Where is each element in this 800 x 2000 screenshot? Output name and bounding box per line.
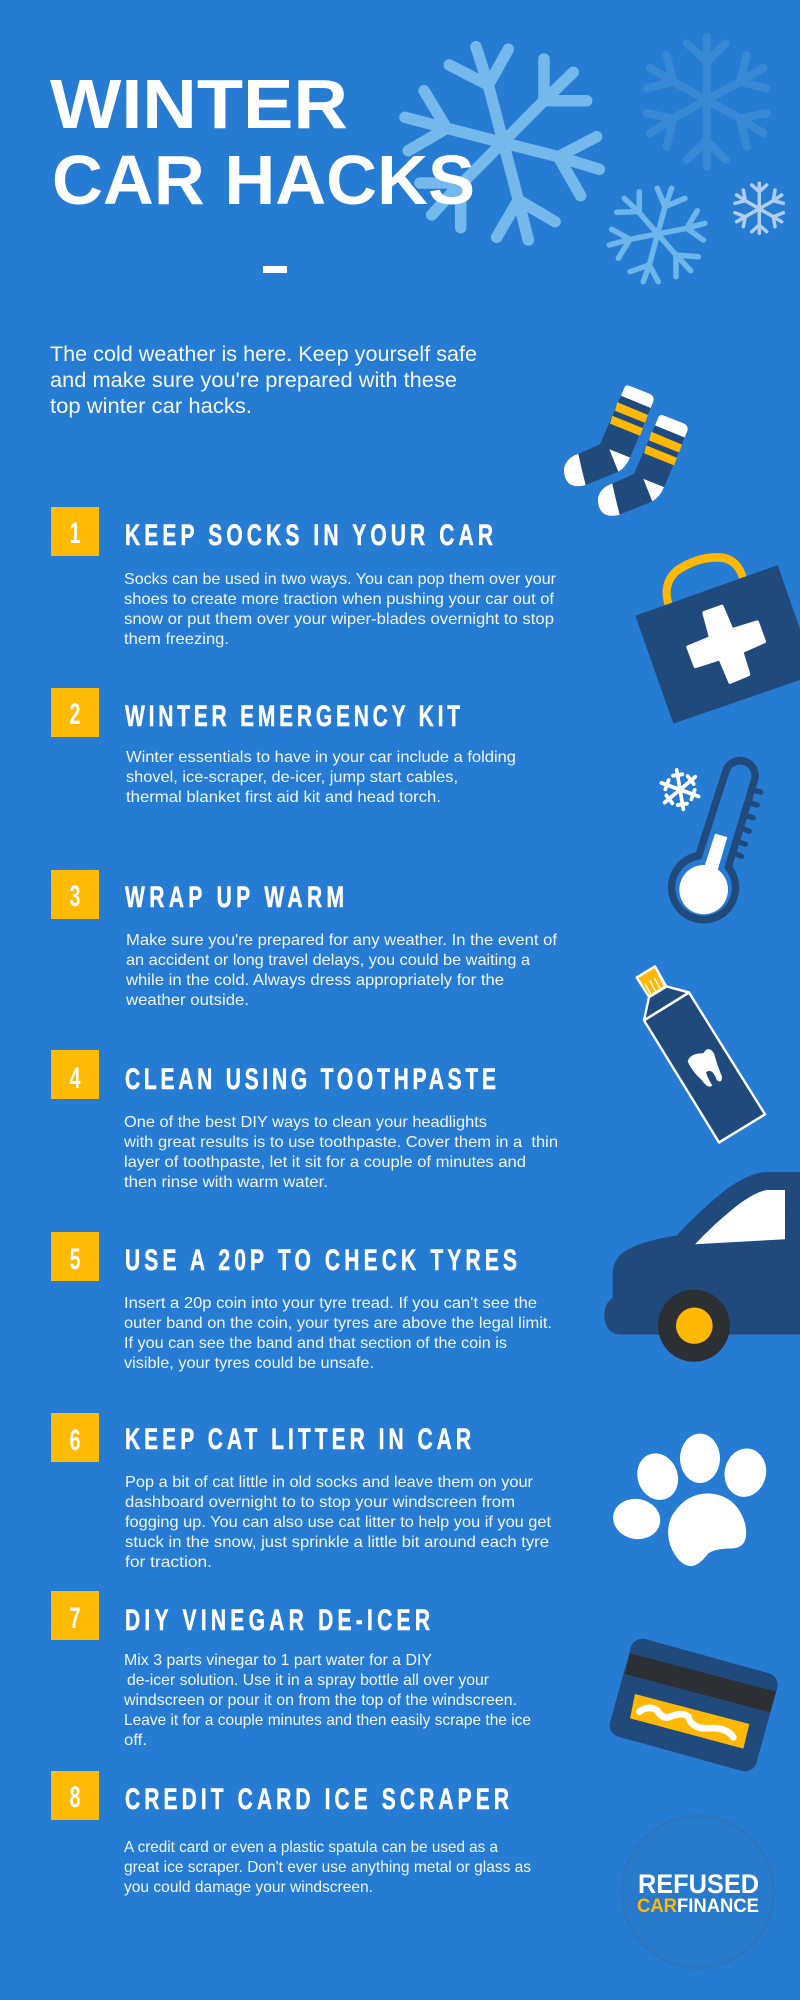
body text 3: an accident or long travel delays, you could be waiting a <box>126 952 530 969</box>
number badge 1: 1 <box>70 517 80 550</box>
number badge 5 <box>51 1232 99 1281</box>
intro text: and make sure you're prepared with these <box>50 368 457 392</box>
icon: car <box>604 1172 800 1362</box>
title: WINTER <box>50 65 348 143</box>
panel: tip 3 <box>51 870 558 1009</box>
body text 3 <box>125 932 558 1009</box>
body text 4 <box>123 1114 558 1191</box>
body text 7: de-icer solution. Use it in a spray bottle all over your <box>127 1672 490 1689</box>
logo: CARFINANCE <box>637 1895 759 1917</box>
body text 1: shoes to create more traction when pushing your car out of <box>124 591 555 608</box>
body text 4: then rinse with warm water. <box>124 1174 328 1191</box>
number badge 4: 4 <box>70 1062 80 1095</box>
body text 5: outer band on the coin, your tyres are above the legal limit. <box>124 1315 552 1332</box>
panel: tip 4 <box>51 1050 558 1191</box>
right sock <box>598 415 688 516</box>
icon: first aid kit <box>635 557 800 724</box>
body text 5: Insert a 20p coin into your tyre tread. If you can't see the <box>124 1295 537 1312</box>
panel: tip 2 <box>51 688 516 806</box>
number badge 5: 5 <box>70 1243 80 1276</box>
body text 1: snow or put them over your wiper-blades overnight to stop <box>124 611 554 628</box>
body text 7 <box>123 1652 531 1749</box>
body text 7: windscreen or pour it on from the top of the windscreen. <box>123 1692 517 1709</box>
heading 3: WRAP UP WARM <box>125 882 344 914</box>
body text 6: fogging up. You can also use cat litter to help you if you get <box>125 1514 552 1531</box>
body text 6: for traction. <box>125 1554 212 1571</box>
body text 7: Leave it for a couple minutes and then easily scrape the ice <box>124 1712 531 1729</box>
body text 2 <box>126 749 516 806</box>
body text 6 <box>125 1474 552 1571</box>
title: CAR HACKS <box>52 141 475 219</box>
body text 3: Make sure you're prepared for any weather. In the event of <box>126 932 558 949</box>
number badge 4 <box>51 1050 99 1099</box>
intro text: The cold weather is here. Keep yourself safe <box>50 342 477 366</box>
panel: tip 7 <box>51 1591 531 1749</box>
body text 4: One of the best DIY ways to clean your headlights <box>124 1114 487 1131</box>
number badge 8: 8 <box>70 1781 80 1814</box>
body text 5: visible, your tyres could be unsafe. <box>124 1355 374 1372</box>
divider dash <box>263 266 287 273</box>
number badge 7: 7 <box>70 1602 80 1635</box>
body text 1: Socks can be used in two ways. You can pop them over your <box>124 571 557 588</box>
body text 2: thermal blanket first aid kit and head torch. <box>126 789 441 806</box>
heading 4: CLEAN USING TOOTHPASTE <box>125 1064 496 1096</box>
small white snowflake <box>661 770 699 809</box>
number badge 1 <box>51 507 99 556</box>
body text 5: If you can see the band and that section of the coin is <box>124 1335 507 1352</box>
intro text: top winter car hacks. <box>50 394 252 418</box>
body text 8: you could damage your windscreen. <box>124 1879 373 1896</box>
logo <box>622 1816 774 1968</box>
panel: tip 6 <box>51 1413 552 1571</box>
logo: REFUSED <box>638 1869 759 1899</box>
left sock <box>564 385 654 486</box>
body text 8: great ice scraper. Don't ever use anything metal or glass as <box>124 1859 531 1876</box>
icon: faint snowflake <box>647 37 767 167</box>
icon: toothpaste tube <box>637 966 765 1142</box>
body text 8 <box>124 1839 531 1896</box>
body text 7: off. <box>124 1732 147 1749</box>
body text 4: layer of toothpaste, let it sit for a couple of minutes and <box>124 1154 526 1171</box>
number badge 6: 6 <box>70 1424 80 1457</box>
heading 6: KEEP CAT LITTER IN CAR <box>125 1424 471 1456</box>
number badge 6 <box>51 1413 99 1462</box>
number badge 3 <box>51 870 99 919</box>
icon: socks <box>564 385 688 516</box>
number badge 3: 3 <box>70 880 80 913</box>
body text 3: while in the cold. Always dress appropriately for the <box>125 972 504 989</box>
icon: thermometer <box>661 761 761 920</box>
icon: small snowflake <box>735 183 783 233</box>
body text 1 <box>124 571 557 648</box>
number badge 2: 2 <box>70 698 80 731</box>
body text 2: shovel, ice-scraper, de-icer, jump start cables, <box>126 769 458 786</box>
icon: credit card <box>607 1636 780 1774</box>
intro text <box>50 342 477 418</box>
body text 2: Winter essentials to have in your car include a folding <box>126 749 516 766</box>
icon: paw print <box>610 1434 771 1566</box>
body text 6: stuck in the snow, just sprinkle a little bit around each tyre <box>125 1534 549 1551</box>
body text 6: Pop a bit of cat little in old socks and leave them on your <box>125 1474 534 1491</box>
title <box>50 65 475 219</box>
body text 6: dashboard overnight to to stop your windscreen from <box>125 1494 515 1511</box>
panel: tip 1 <box>51 507 557 648</box>
body text 7: Mix 3 parts vinegar to 1 part water for a DIY <box>124 1652 432 1669</box>
icon: medium snowflake <box>609 188 705 282</box>
heading 7: DIY VINEGAR DE-ICER <box>125 1605 430 1637</box>
number badge 8 <box>51 1771 99 1820</box>
panel: tip 5 <box>51 1232 552 1372</box>
heading 5: USE A 20P TO CHECK TYRES <box>125 1245 517 1277</box>
heading 1: KEEP SOCKS IN YOUR CAR <box>125 520 493 552</box>
panel: tip 8 <box>51 1771 531 1896</box>
heading 8: CREDIT CARD ICE SCRAPER <box>125 1784 509 1816</box>
body text 1: them freezing. <box>124 631 229 648</box>
body text 4: with great results is to use toothpaste. Cover them in a thin <box>123 1134 558 1151</box>
icon: large snowflake <box>405 47 599 240</box>
body text 3: weather outside. <box>125 992 249 1009</box>
number badge 2 <box>51 688 99 737</box>
body text 5 <box>124 1295 552 1372</box>
body text 8: A credit card or even a plastic spatula can be used as a <box>124 1839 498 1856</box>
number badge 7 <box>51 1591 99 1640</box>
heading 2: WINTER EMERGENCY KIT <box>125 701 460 733</box>
